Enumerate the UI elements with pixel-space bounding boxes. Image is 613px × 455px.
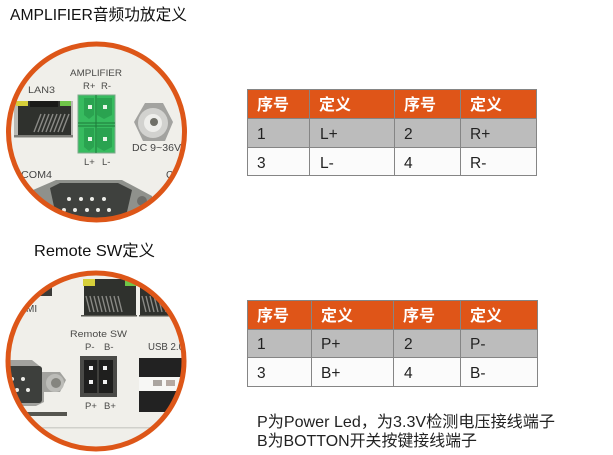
title: AMPLIFIER definition: AMPLIFIER音频功放定义 [10,6,187,24]
remote switch connector: P- [85,342,94,353]
table: amplifier pin definition: R+ [470,126,490,143]
table: remote switch pin definition: 2 [404,336,413,353]
table: amplifier pin definition: L- [320,155,334,172]
DC power connector: DC 9~36V [132,143,181,154]
table: remote switch pin definition [248,300,538,386]
table: amplifier pin definition: 4 [404,155,413,172]
remote switch connector: P+ [85,401,97,412]
table: amplifier pin definition: 1 [257,126,266,143]
note: P and B pin explanation: P为Power Led，为3.3V检测电压接线端子 [257,413,555,431]
amplifier terminal block [70,68,122,168]
note: P and B pin explanation: B为BOTTON开关按键接线端子 [257,432,477,450]
photo circle: remote switch connector panel [5,273,189,449]
table: remote switch pin definition: 1 [257,336,266,353]
LAN3 port [14,85,73,138]
serial port side view [5,360,67,416]
LAN ports [81,279,169,316]
photo circle: amplifier connector panel [8,44,184,225]
table: amplifier pin definition: 序号 [404,95,436,114]
amplifier terminal block: L- [102,157,110,168]
HDMI label and port edge [26,288,52,312]
amplifier terminal block: AMPLIFIER [70,68,122,79]
remote switch connector [70,329,127,412]
table: remote switch pin definition: 定义 [470,306,502,325]
table: amplifier pin definition [248,90,536,176]
table: amplifier pin definition: 序号 [257,95,289,114]
USB 2.0 ports [139,343,182,412]
table: amplifier pin definition: L+ [320,126,338,143]
note: P and B pin explanation [257,413,555,450]
COM4 serial port: COM4 [21,170,52,181]
table: remote switch pin definition: P+ [321,336,340,353]
table: remote switch pin definition: B- [470,365,486,382]
USB 2.0 ports: USB 2.0 [148,342,184,353]
table: remote switch pin definition: B+ [321,365,340,382]
table: remote switch pin definition: 序号 [403,306,435,325]
remote switch connector: B- [104,342,114,353]
DC power connector [132,103,181,154]
table: amplifier pin definition: 定义 [470,95,502,114]
amplifier terminal block: L+ [84,157,95,168]
COM4 serial port [22,171,172,218]
amplifier terminal block: R- [101,81,111,92]
amplifier terminal block: R+ [83,81,96,92]
remote switch connector: B+ [104,401,116,412]
table: remote switch pin definition: 序号 [257,306,289,325]
HDMI label and port edge: MI [26,304,37,315]
table: amplifier pin definition: 定义 [319,95,351,114]
title: Remote SW definition: Remote SW定义 [34,242,155,260]
table: remote switch pin definition: 定义 [321,306,353,325]
table: remote switch pin definition: P- [470,336,486,353]
table: amplifier pin definition: 2 [404,126,413,143]
table: amplifier pin definition: R- [470,155,486,172]
remote switch connector: Remote SW [70,329,127,340]
table: remote switch pin definition: 4 [404,365,413,382]
LAN3 port: LAN3 [28,85,55,96]
table: remote switch pin definition: 3 [257,365,266,382]
table: amplifier pin definition: 3 [257,155,266,172]
COM4 serial port: C [166,170,173,181]
